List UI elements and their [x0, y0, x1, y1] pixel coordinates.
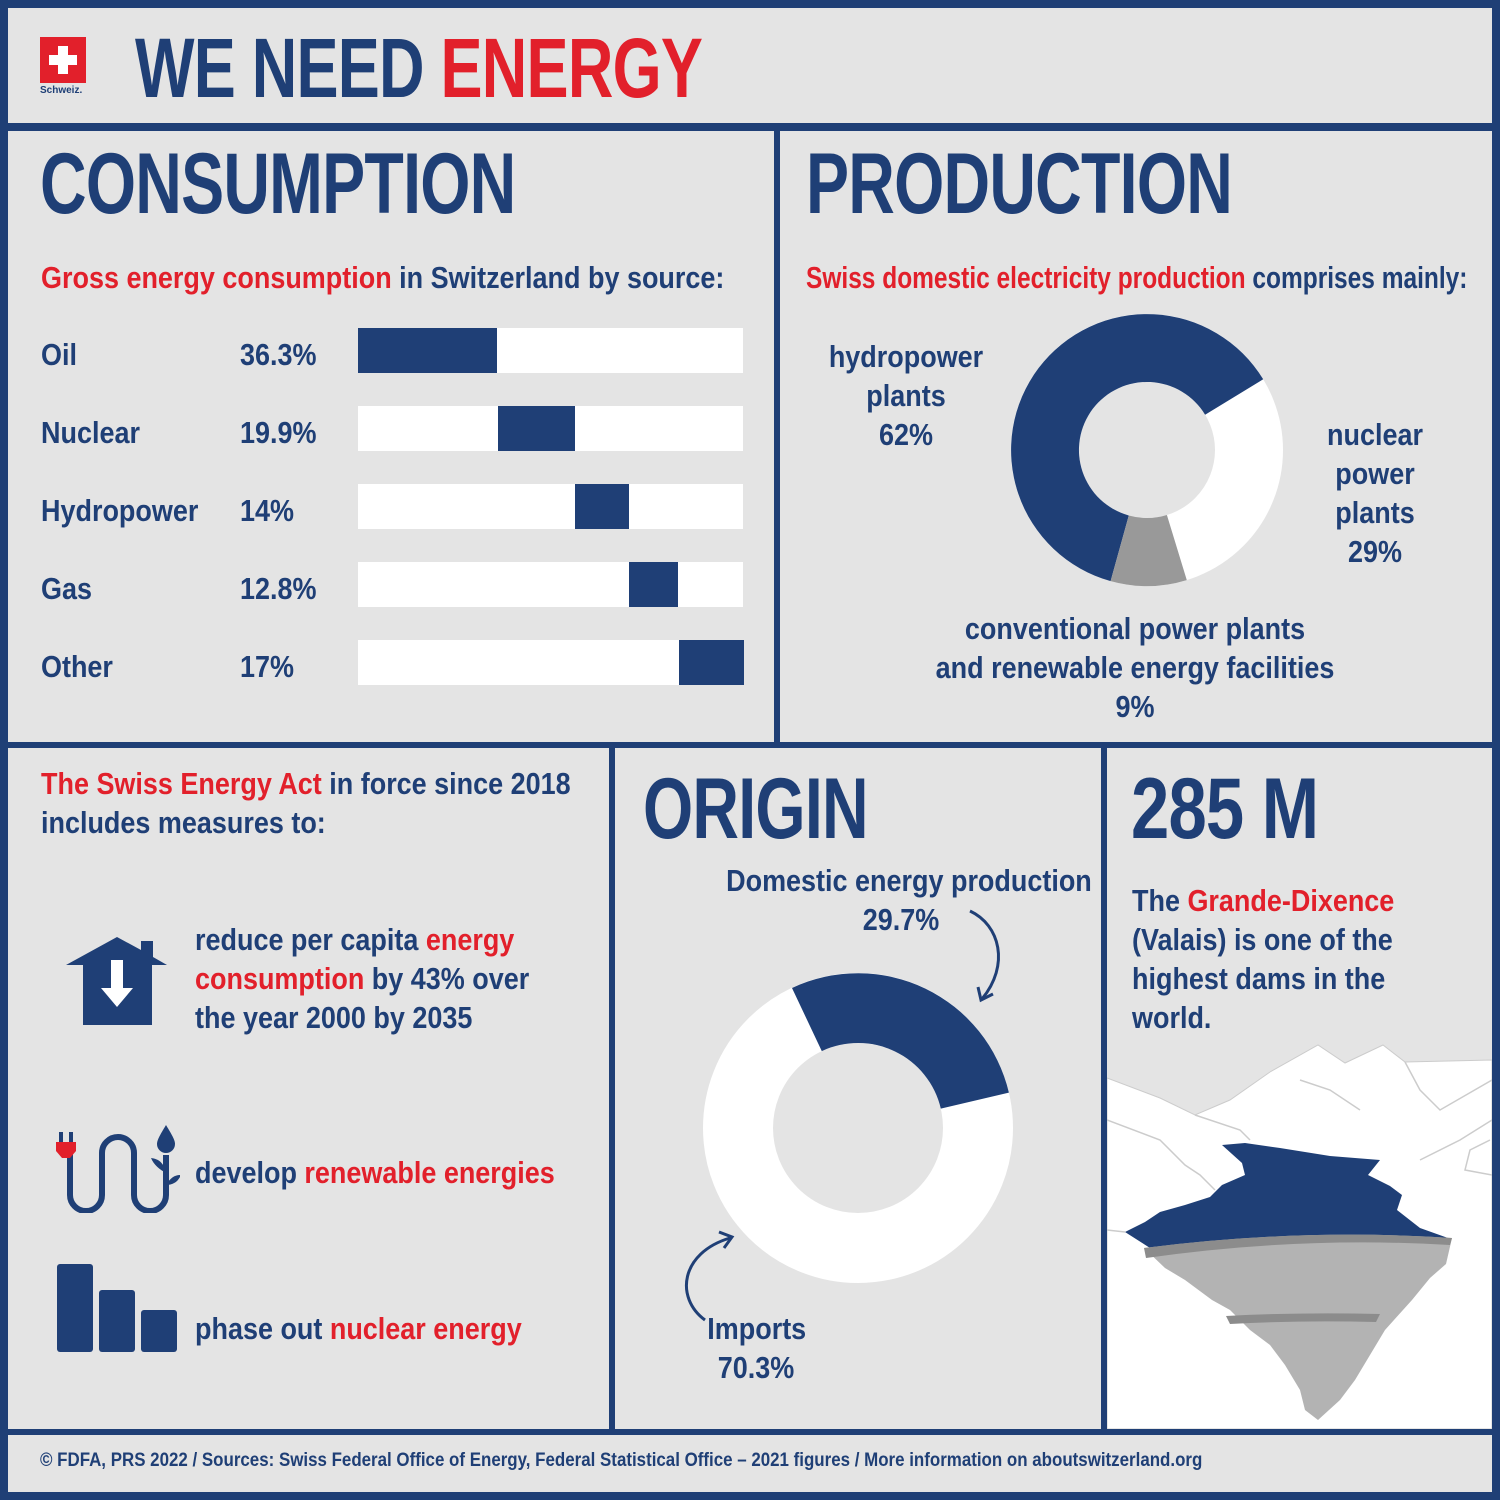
dam text	[1132, 883, 1394, 1035]
label nuclear	[1327, 417, 1423, 569]
label hydropower	[829, 339, 983, 452]
bar chart: 19.9%	[240, 415, 316, 450]
logo: Schweiz.	[40, 85, 82, 96]
label domestic: 29.7%	[863, 902, 939, 937]
measure 1: consumption by 43% over	[195, 961, 529, 996]
measure 2: develop renewable energies	[195, 1155, 555, 1190]
measure 3: phase out nuclear energy	[195, 1311, 522, 1346]
dam illustration	[1107, 1044, 1492, 1429]
label conventional: and renewable energy facilities	[936, 650, 1334, 685]
label nuclear: power	[1335, 456, 1415, 491]
energy act intro	[41, 766, 571, 840]
label hydropower: plants	[866, 378, 946, 413]
label imports: 70.3%	[718, 1350, 794, 1385]
measure 1	[195, 922, 529, 1035]
heading consumption: CONSUMPTION	[40, 136, 516, 232]
bar chart: 17%	[240, 649, 294, 684]
icon: declining bars	[57, 1264, 177, 1352]
bar chart: Oil	[41, 337, 77, 372]
heading 285 M: 285 M	[1131, 761, 1318, 857]
label conventional: 9%	[1116, 689, 1154, 724]
bar chart: Hydropower	[41, 493, 198, 528]
label nuclear: 29%	[1348, 534, 1402, 569]
label imports: Imports	[707, 1311, 806, 1346]
energy act intro: includes measures to:	[41, 805, 326, 840]
bar chart	[41, 328, 744, 685]
dam text: highest dams in the	[1132, 961, 1385, 996]
measure 1: the year 2000 by 2035	[195, 1000, 472, 1035]
footer: © FDFA, PRS 2022 / Sources: Swiss Federal Office of Energy, Federal Statistical Office – 2021 figures / More information on aboutswitzerland.org	[40, 1450, 1202, 1471]
label imports	[707, 1311, 806, 1385]
logo	[40, 37, 86, 96]
heading origin: ORIGIN	[643, 761, 868, 857]
label nuclear: plants	[1335, 495, 1415, 530]
subtitle consumption: Gross energy consumption in Switzerland by source:	[41, 260, 724, 295]
label hydropower: hydropower	[829, 339, 983, 374]
label conventional: conventional power plants	[965, 611, 1305, 646]
dam text: (Valais) is one of the	[1132, 922, 1393, 957]
energy act intro: The Swiss Energy Act in force since 2018	[41, 766, 571, 801]
dam text: The Grande-Dixence	[1132, 883, 1394, 918]
bar chart: 12.8%	[240, 571, 316, 606]
bar chart: Nuclear	[41, 415, 140, 450]
arrow domestic	[969, 910, 1000, 1002]
donut origin	[703, 973, 1013, 1283]
bar chart: 36.3%	[240, 337, 316, 372]
donut production	[1011, 314, 1283, 586]
label domestic: Domestic energy production	[726, 863, 1092, 898]
measure 1: reduce per capita energy	[195, 922, 514, 957]
bar chart: Other	[41, 649, 113, 684]
heading production: PRODUCTION	[806, 136, 1232, 232]
title: WE NEED ENERGY	[135, 21, 702, 115]
bar chart: 14%	[240, 493, 294, 528]
subtitle production: Swiss domestic electricity production comprises mainly:	[806, 260, 1467, 295]
arrow imports	[684, 1230, 734, 1322]
label hydropower: 62%	[879, 417, 933, 452]
dam text: world.	[1132, 1000, 1211, 1035]
icon: plug plant	[56, 1125, 180, 1213]
bar chart: Gas	[41, 571, 92, 606]
label conventional	[936, 611, 1334, 724]
label nuclear: nuclear	[1327, 417, 1423, 452]
label domestic	[726, 863, 1092, 937]
icon: house	[66, 937, 167, 1025]
